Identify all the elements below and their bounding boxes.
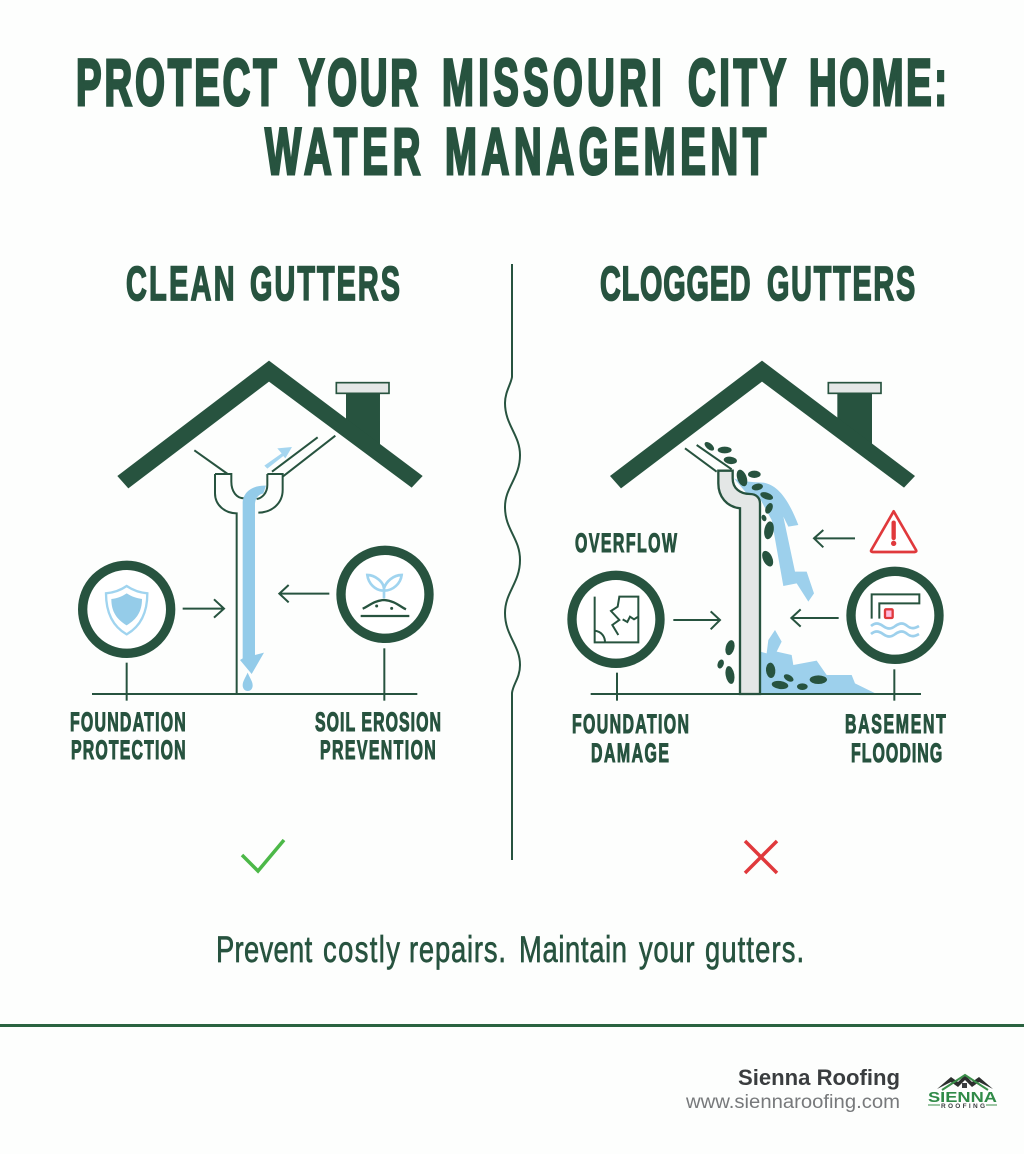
label: foundation protection: PROTECTION bbox=[71, 735, 186, 765]
tagline: gutters. bbox=[705, 929, 804, 970]
label: foundation damage: FOUNDATION bbox=[572, 709, 689, 739]
label: basement flooding: FLOODING bbox=[851, 738, 942, 768]
tagline: Maintain bbox=[519, 929, 627, 970]
label: basement flooding bbox=[845, 709, 946, 768]
ground line bbox=[92, 691, 417, 697]
footer brand text: www.siennaroofing.com bbox=[685, 1092, 900, 1113]
arrow bbox=[279, 585, 329, 602]
water flow arrow bbox=[240, 447, 292, 691]
label: soil erosion prevention: PREVENTION bbox=[320, 735, 436, 765]
wavy divider bbox=[505, 264, 520, 860]
logo: Sienna Roofing: ROOFING bbox=[941, 1103, 985, 1110]
arrow bbox=[673, 611, 720, 629]
label: foundation damage bbox=[572, 709, 689, 768]
heading: clogged gutters: CLOGGED bbox=[600, 258, 751, 311]
title: CITY bbox=[688, 46, 786, 120]
tagline: your bbox=[639, 929, 695, 970]
footer brand text bbox=[685, 1065, 900, 1113]
tagline: Prevent bbox=[216, 929, 312, 970]
icon: basement flooding bbox=[851, 571, 939, 701]
footer rule bbox=[0, 1024, 1024, 1027]
arrow bbox=[814, 530, 855, 547]
icon: soil erosion bbox=[341, 550, 429, 701]
heading: clean gutters: CLEAN bbox=[126, 258, 235, 311]
icon: foundation protection bbox=[83, 565, 171, 701]
label: foundation protection bbox=[70, 707, 186, 765]
arrow bbox=[183, 599, 224, 618]
panel: clogged gutters illustration bbox=[572, 361, 939, 701]
leaves and debris bbox=[703, 440, 827, 690]
title: PROTECT bbox=[76, 46, 277, 120]
gutter and downspout bbox=[685, 445, 760, 694]
tagline: costly bbox=[323, 929, 401, 970]
footer brand text: Sienna Roofing bbox=[738, 1065, 900, 1090]
icon: check mark bbox=[242, 840, 284, 871]
panel: clean gutters illustration bbox=[83, 361, 429, 701]
logo: Sienna Roofing: SIENNA bbox=[928, 1089, 997, 1106]
tagline: repairs. bbox=[409, 929, 506, 970]
heading: clogged gutters: GUTTERS bbox=[767, 258, 915, 311]
house roof bbox=[610, 361, 915, 488]
arrow bbox=[791, 609, 839, 627]
label: overflow: OVERFLOW bbox=[575, 528, 677, 558]
ground line bbox=[591, 691, 921, 697]
icon: foundation damage bbox=[572, 575, 660, 701]
overflow water bbox=[734, 478, 814, 602]
title: YOUR bbox=[299, 46, 418, 120]
title: MANAGEMENT bbox=[445, 115, 766, 189]
icon: warning triangle bbox=[871, 511, 916, 552]
title: WATER bbox=[265, 115, 420, 189]
heading: clean gutters bbox=[126, 258, 400, 311]
label: foundation protection: FOUNDATION bbox=[70, 707, 186, 737]
title: HOME: bbox=[809, 46, 947, 120]
icon: cross mark bbox=[745, 841, 777, 873]
title: MISSOURI bbox=[442, 46, 662, 120]
heading: clean gutters: GUTTERS bbox=[250, 258, 400, 311]
label: basement flooding: BASEMENT bbox=[845, 709, 946, 739]
label: foundation damage: DAMAGE bbox=[591, 738, 669, 768]
label: soil erosion prevention: SOIL EROSION bbox=[315, 707, 441, 737]
logo: Sienna Roofing bbox=[928, 1075, 997, 1110]
heading: clogged gutters bbox=[600, 258, 915, 311]
puddle bbox=[760, 630, 877, 694]
title bbox=[76, 46, 947, 189]
gutter and downspout bbox=[194, 436, 335, 694]
label: soil erosion prevention bbox=[315, 707, 441, 765]
house roof bbox=[117, 361, 423, 488]
tagline bbox=[216, 929, 804, 970]
